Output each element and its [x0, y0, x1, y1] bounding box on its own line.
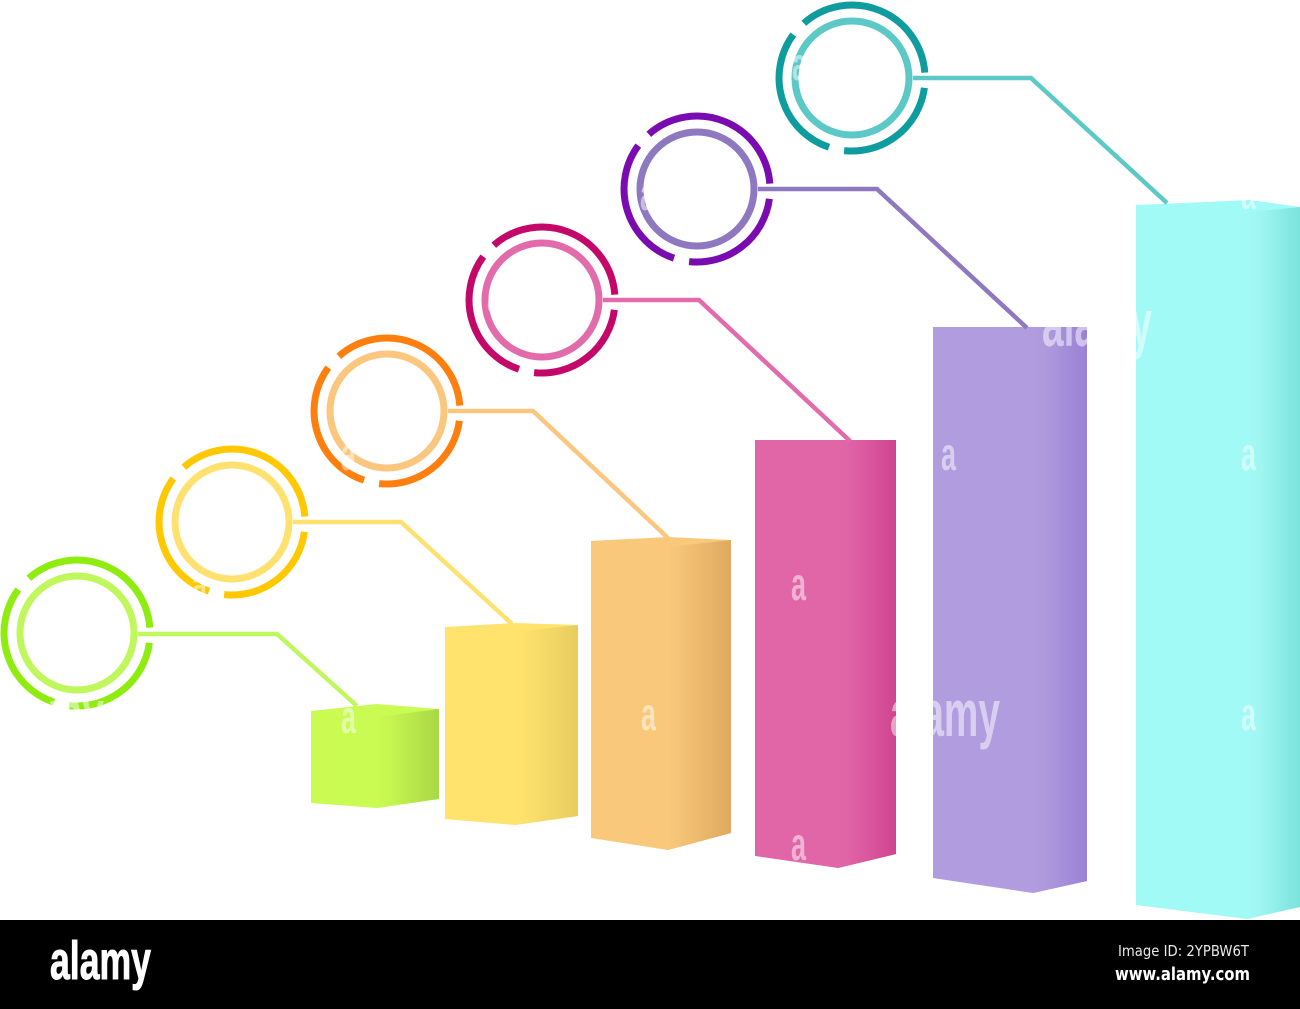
watermark fragments: a: [487, 270, 502, 322]
bar 6: teal: [1136, 200, 1300, 919]
watermark fragments: a: [641, 688, 656, 740]
circle 4: pink: [469, 227, 615, 373]
bar 4: pink: [755, 440, 896, 868]
connector 5: purple: [758, 189, 1027, 328]
watermark fragments: a: [341, 428, 356, 480]
footer logo: alamy: [50, 931, 151, 991]
bar 2: yellow: [445, 623, 578, 825]
watermark fragments: a: [1241, 167, 1256, 219]
footer url: www.alamy.com: [1115, 964, 1250, 985]
watermark fragments: alamy: [890, 676, 1000, 750]
footer image id: Image ID: 2YPBW6T: [1118, 942, 1250, 960]
bar 3: orange: [591, 537, 731, 850]
connector 6: teal: [913, 78, 1167, 203]
watermark fragments: a: [792, 38, 807, 90]
bar 1: green: [311, 704, 439, 808]
circle 3: orange: [314, 338, 460, 484]
circle 2: yellow: [159, 449, 305, 595]
watermark fragments: a: [1241, 688, 1256, 740]
circle 6: teal: [779, 5, 925, 151]
connector 3: orange: [448, 411, 668, 538]
watermark fragments: a: [192, 558, 207, 610]
connector 4: pink: [603, 300, 850, 441]
watermark fragments: alamy: [1042, 286, 1152, 360]
watermark fragments: [0, 38, 1256, 870]
watermark fragments: a: [791, 818, 806, 870]
connector 1: green: [138, 634, 357, 706]
circle 5: purple: [624, 116, 770, 262]
watermark fragments: a: [1241, 428, 1256, 480]
connector 2: yellow: [293, 522, 512, 624]
watermark fragments: a: [791, 558, 806, 610]
circle 1: green: [4, 560, 150, 706]
watermark fragments: a: [341, 691, 356, 743]
bar 5: purple: [933, 327, 1087, 893]
watermark fragments: a: [640, 168, 655, 220]
footer bar: [0, 920, 1300, 1009]
watermark fragments: a: [941, 428, 956, 480]
